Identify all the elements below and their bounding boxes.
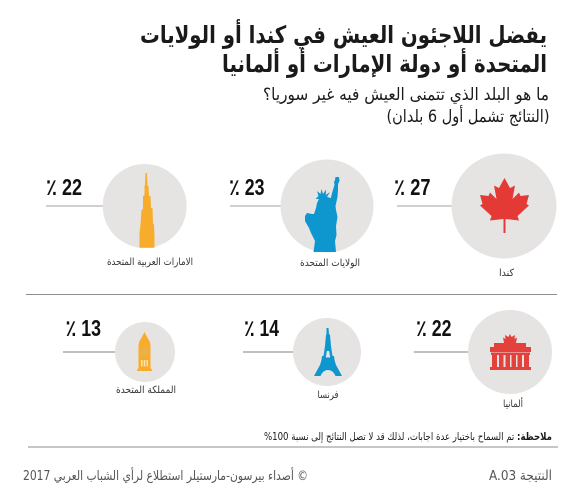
percentage: USA: ٪ 23 bbox=[229, 174, 264, 200]
panel: Canada bbox=[394, 154, 556, 279]
icon: Burj Khalifa bbox=[140, 173, 154, 248]
label: USA: الولايات المتحدة bbox=[300, 258, 360, 269]
icon: maple leaf bbox=[480, 178, 529, 233]
divider bbox=[26, 294, 557, 296]
footer rule bbox=[28, 446, 558, 448]
panel: USA bbox=[229, 160, 374, 269]
panel: UAE bbox=[46, 164, 193, 268]
label: France: فرنسا bbox=[318, 390, 339, 401]
subtitle: ما هو البلد الذي تتمنى العيش فيه غير سوريا؟ bbox=[263, 85, 549, 105]
label: UAE: الامارات العربية المتحدة bbox=[107, 257, 193, 268]
icon: Eiffel Tower bbox=[314, 328, 342, 376]
panel: France bbox=[243, 315, 361, 401]
percentage: Germany: ٪ 22 bbox=[416, 315, 452, 341]
label: United Kingdom: المملكة المتحدة bbox=[116, 385, 176, 396]
footer: source: © أصداء بيرسون-مارستيلر استطلاع لرأي الشباب العربي 2017 bbox=[23, 467, 308, 484]
percentage: UAE: ٪ 22 bbox=[46, 174, 82, 200]
icon: Statue of Liberty bbox=[305, 177, 340, 252]
percentage: France: ٪ 14 bbox=[244, 315, 279, 341]
subtitle: (النتائج تشمل أول 6 بلدان) bbox=[387, 105, 550, 127]
label: Germany: ألمانيا bbox=[503, 397, 523, 410]
title bbox=[140, 19, 547, 78]
footer: result number: النتيجة A.03 bbox=[489, 468, 552, 484]
label: Canada: كندا bbox=[499, 268, 514, 279]
panel: United Kingdom bbox=[63, 315, 176, 396]
percentage: United Kingdom: ٪ 13 bbox=[66, 315, 101, 341]
icon: Brandenburg Gate bbox=[490, 334, 531, 370]
panel: Germany bbox=[414, 310, 552, 410]
percentage: Canada: ٪ 27 bbox=[394, 174, 430, 200]
note: ملاحظة: تم السماح باختيار عدة اجابات، لذلك قد لا تصل النتائج إلى نسبة 100% bbox=[264, 431, 552, 443]
subtitle bbox=[263, 85, 550, 127]
icon: Big Ben bbox=[137, 332, 152, 371]
